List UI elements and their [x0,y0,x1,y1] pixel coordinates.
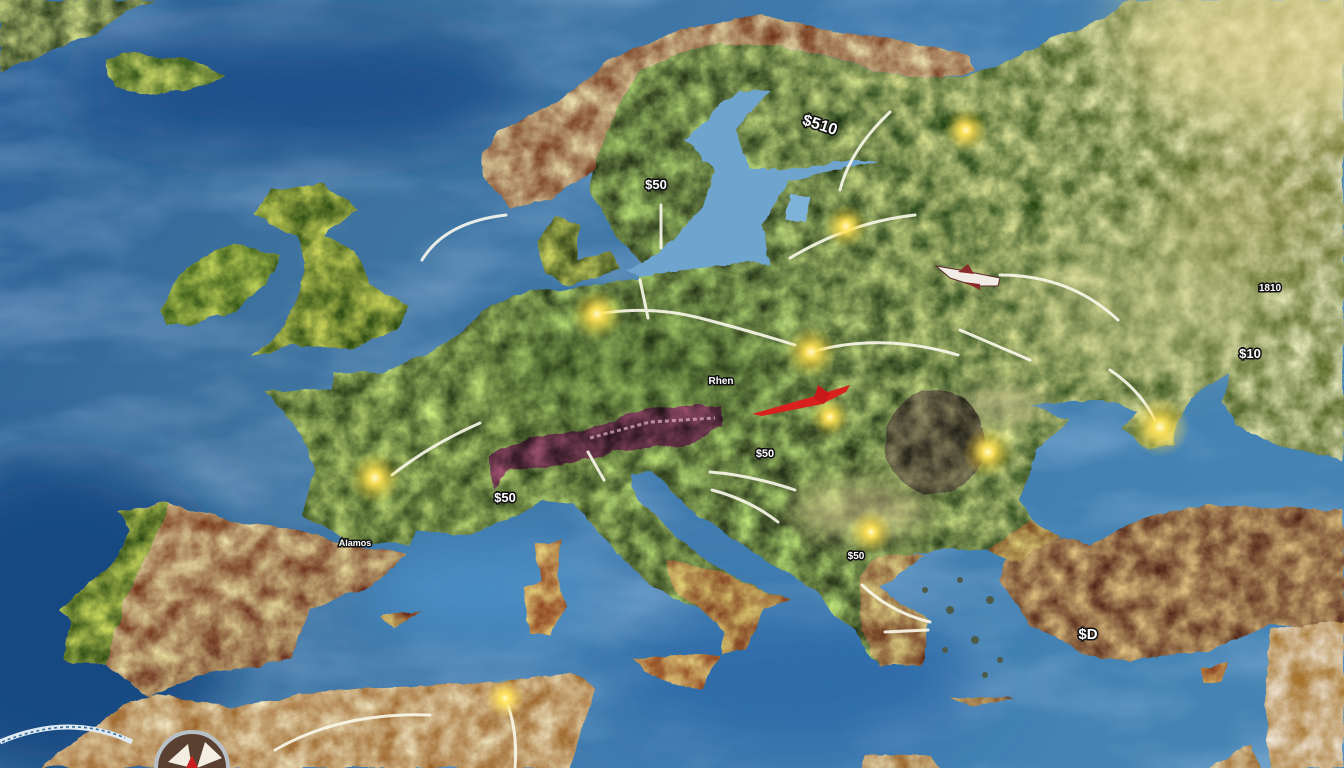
Corsica and Sardinia [525,540,565,635]
Balearic island [380,610,420,628]
label: Greece north: $50 [848,551,865,562]
dark basin [885,390,985,494]
Levant [1265,620,1344,768]
Bosphorus land bridge [985,520,1060,562]
Cyprus [1200,662,1228,682]
trail with small script lower left [0,727,132,742]
Egypt coast [860,745,1262,768]
North Africa [40,672,595,768]
Norway [482,15,975,207]
green northwest Iberia [60,503,170,665]
icon: white airplane [936,264,1000,290]
label: Sweden price: $50 [645,177,667,192]
Sicily [632,655,720,690]
label: Ukraine price: $10 [1239,346,1261,361]
Ireland [160,243,280,325]
Denmark [537,215,620,285]
glowing route arcs [275,112,1155,768]
Southern Italy tan [665,560,790,655]
pale steppe tint over eastern land [490,0,1344,538]
Greece tan [860,555,930,665]
label: Balkans price: $50 [756,448,774,460]
Crete [950,697,1015,708]
Aegean islands [922,577,1003,678]
Baltic Sea [625,90,880,276]
Turkey [1000,505,1344,660]
Alps [488,405,722,490]
landmass: continental Europe, Sweden, Finland and Russia [265,0,1344,665]
label: central Europe: Rhen [708,376,734,387]
map labels [339,112,1282,643]
label: Turkey price: $D [1078,626,1098,643]
icon: compass rose [156,732,228,768]
label: Italy north price: $50 [494,490,516,505]
label: Russia code: 1810 [1259,283,1282,294]
icon: red airplane with trail [752,385,850,416]
Great Britain [252,183,408,358]
label: Finland price: $510 [800,112,839,139]
top-left land [0,0,155,72]
glowing city markers [349,108,1190,718]
label: Pyrenees: Alamos [339,538,371,548]
Gulf of Riga [785,195,810,222]
Spain and Portugal [60,503,408,698]
Iceland [105,52,225,95]
